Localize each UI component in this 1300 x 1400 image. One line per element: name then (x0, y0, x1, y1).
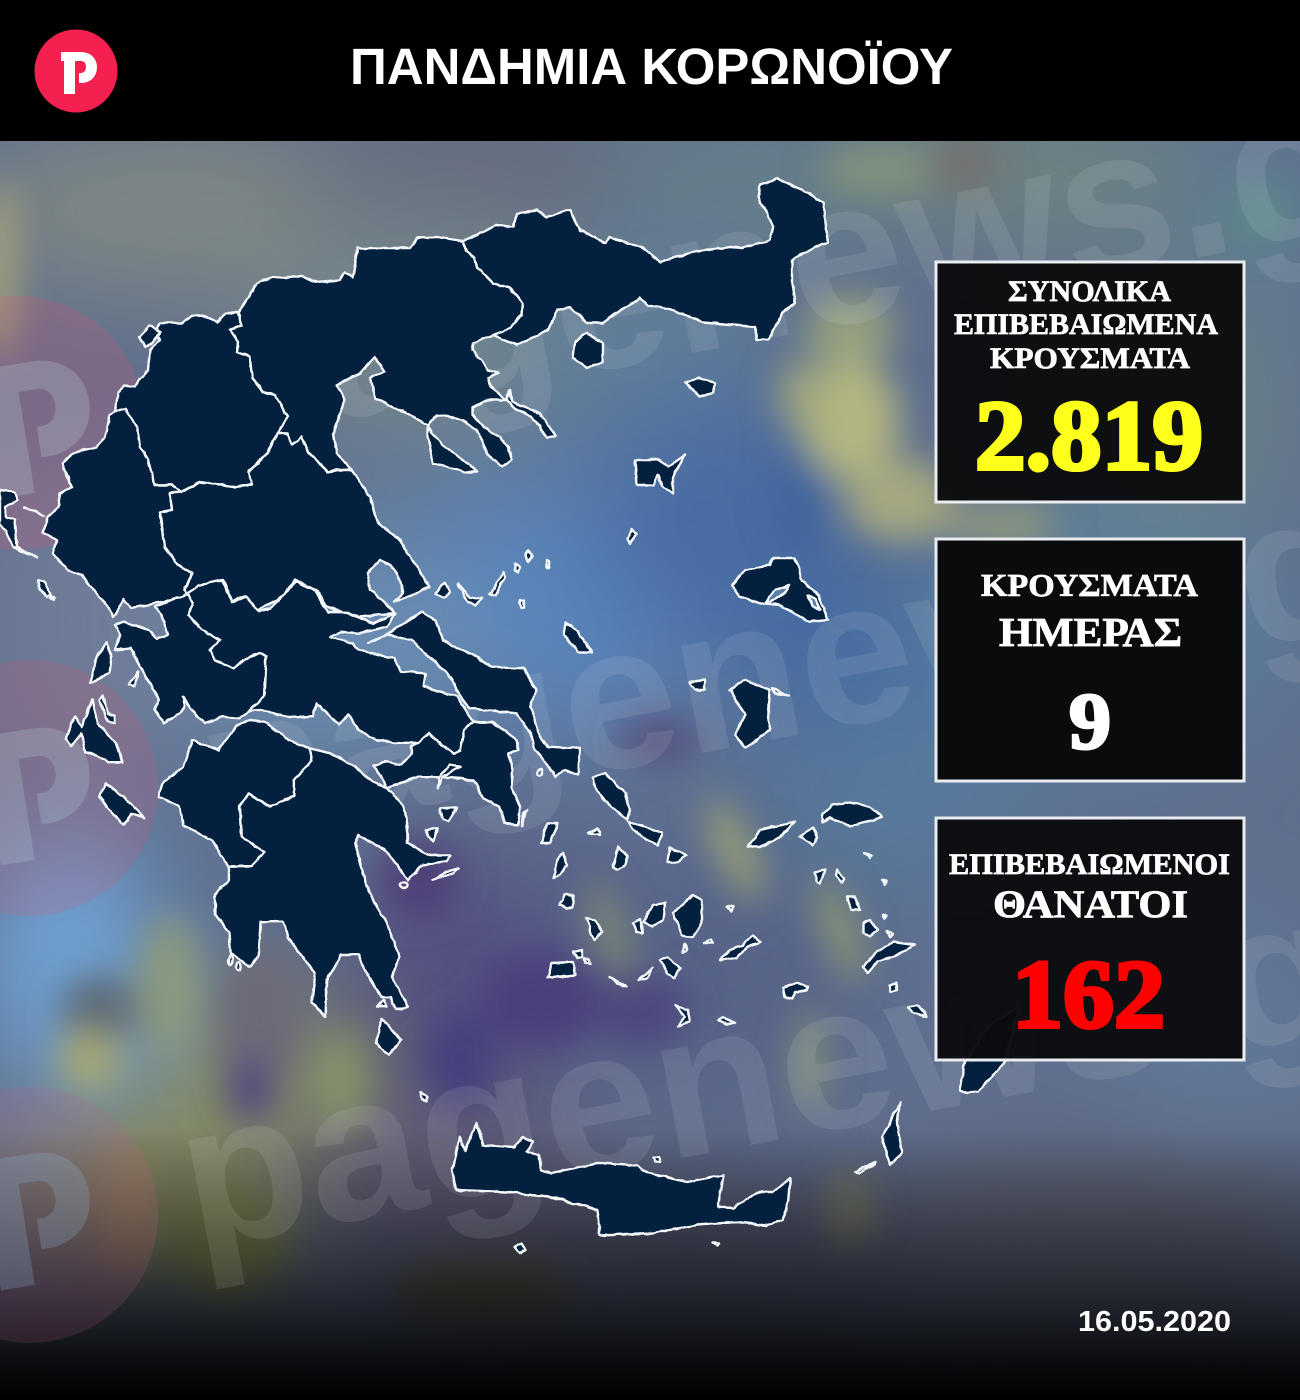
date: 16.05.2020 (1078, 1306, 1231, 1338)
Cyclades islands (542, 773, 760, 1027)
island: Crete (452, 1123, 790, 1235)
header bar (0, 0, 1300, 141)
lake: Prespa (139, 325, 160, 347)
region: Central Greece (189, 580, 473, 753)
island: Evia (368, 612, 580, 777)
panel: cases of the day (936, 539, 1244, 781)
region: Central Macedonia (230, 237, 555, 472)
region: Epirus (42, 408, 192, 617)
North Aegean islands (435, 333, 828, 748)
watermark: pagenews logos (0, 296, 158, 1343)
Dodecanese islands (748, 802, 1020, 1173)
western and southern regions (66, 580, 580, 1055)
region: Attica (373, 722, 520, 825)
panel: total confirmed cases: ΣΥΝΟΛΙΚΑ (1008, 275, 1171, 308)
panel: confirmed deaths (936, 818, 1244, 1060)
watermark: pagenews text (160, 28, 1300, 1293)
map of Greece (0, 179, 1020, 1253)
Cretan islets (421, 1092, 719, 1253)
region: Thessaly (160, 433, 430, 617)
title: ΠΑΝΔΗΜΙΑ ΚΟΡΩΝΟΪΟΥ (350, 38, 953, 95)
region: Thrace (463, 179, 828, 345)
panel: total confirmed cases: 2.819 (975, 380, 1203, 491)
Ionian north: Corfu and Paxos (0, 490, 55, 600)
region: West Macedonia (115, 313, 287, 492)
panel: cases of the day: 9 (1069, 678, 1111, 766)
panel: confirmed deaths: ΕΠΙΒΕΒΑΙΩΜΕΝΟΙ (949, 848, 1230, 881)
panel: cases of the day: ΚΡΟΥΣΜΑΤΑ (981, 567, 1198, 603)
panel: confirmed deaths: 162 (1012, 941, 1165, 1048)
panel: total confirmed cases (936, 262, 1244, 502)
panel: total confirmed cases: ΚΡΟΥΣΜΑΤΑ (990, 342, 1190, 375)
Ionian and Saronic islands (66, 642, 543, 1055)
icon: pagenews logo (34, 30, 118, 112)
panel: confirmed deaths: ΘΑΝΑΤΟΙ (993, 883, 1188, 926)
panel: cases of the day: ΗΜΕΡΑΣ (999, 609, 1182, 655)
panel: total confirmed cases: ΕΠΙΒΕΒΑΙΩΜΕΝΑ (954, 308, 1218, 341)
region: Aetolia-Acarnania (115, 593, 266, 723)
region: Peloponnese (159, 720, 450, 1017)
